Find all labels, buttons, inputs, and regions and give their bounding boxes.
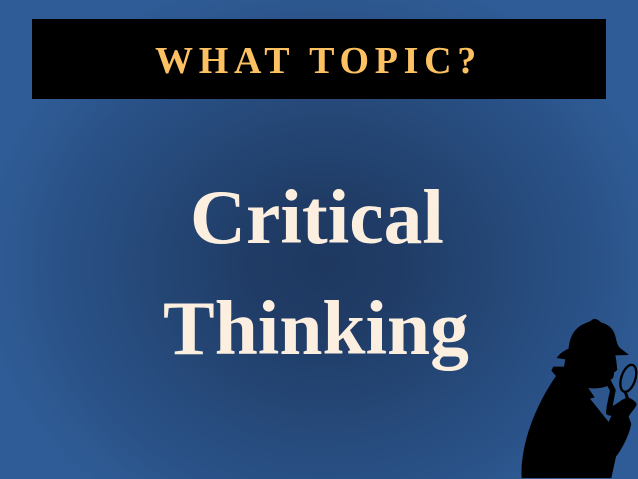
header bar xyxy=(32,19,606,99)
title line: critical: Critical xyxy=(190,174,444,260)
title line: thinking: Thinking xyxy=(163,285,469,371)
heading: what topic: WHAT TOPIC? xyxy=(155,40,482,82)
